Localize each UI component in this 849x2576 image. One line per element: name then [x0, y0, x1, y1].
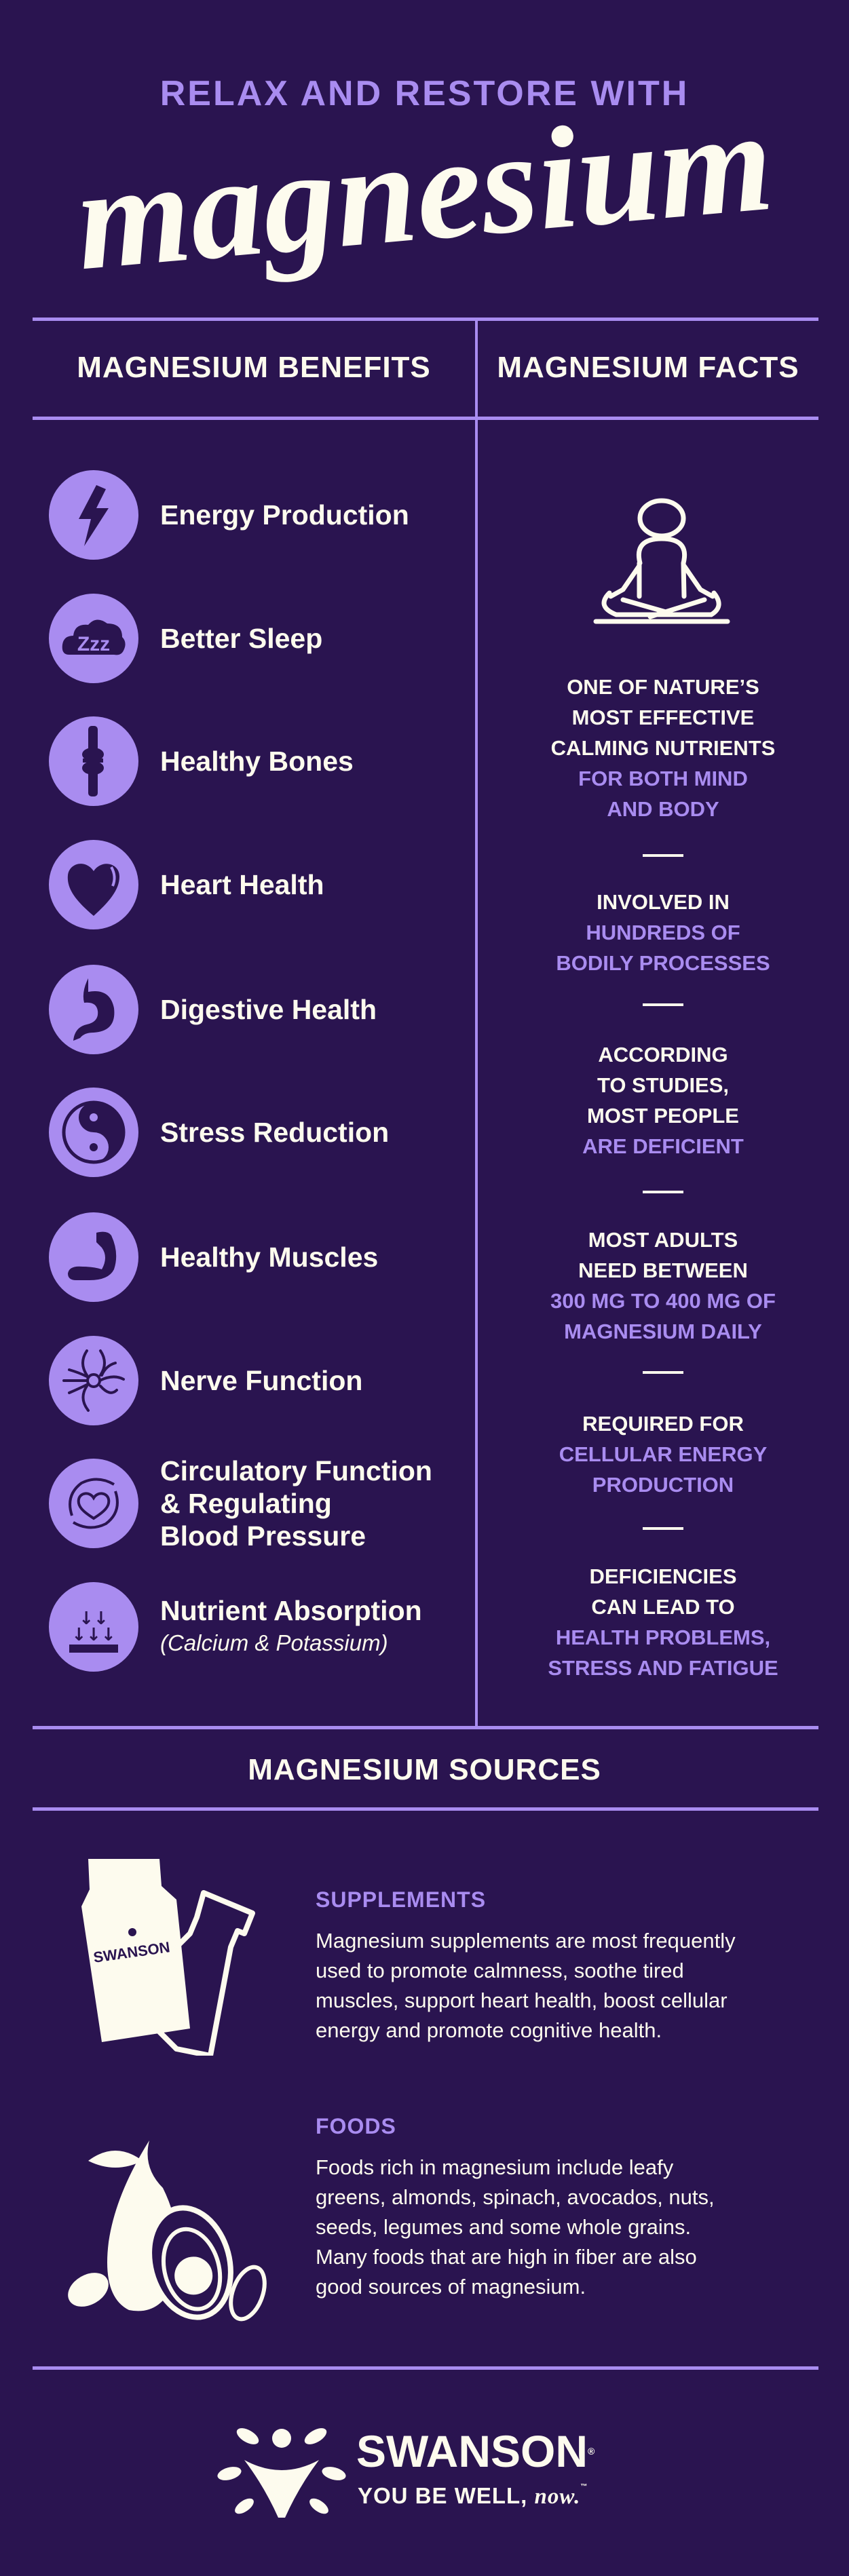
fact 2: INVOLVED IN [597, 890, 730, 914]
benefit: nutrient absorption: ↓↓ [79, 1609, 109, 1629]
fact 3: MOST PEOPLE [587, 1104, 739, 1128]
fact 4: 300 MG TO 400 MG OF [550, 1289, 776, 1313]
text: foods: Many foods that are high in fiber are also [316, 2245, 697, 2269]
icon: supplement bottle [81, 1859, 255, 2056]
benefit: stress reduction: Stress Reduction [160, 1117, 389, 1148]
text: supplements [316, 1887, 736, 2042]
fact 6: HEALTH PROBLEMS, [556, 1626, 770, 1649]
fact 4: MOST ADULTS [588, 1228, 738, 1252]
text: supplements: energy and promote cognitive health. [316, 2018, 662, 2042]
fact 5: REQUIRED FOR [582, 1412, 744, 1436]
text: supplements: muscles, support heart health, boost cellular [316, 1988, 728, 2012]
icon: swanson bird [217, 2428, 346, 2518]
benefit: heart health [49, 840, 324, 929]
fact 4: NEED BETWEEN [578, 1258, 748, 1282]
fact 2: BODILY PROCESSES [556, 951, 770, 975]
fact 6: DEFICIENCIES [589, 1564, 737, 1588]
benefit: energy production: Energy Production [160, 499, 409, 531]
fact 1 [551, 675, 775, 821]
text: foods: Foods rich in magnesium include leafy [316, 2155, 673, 2179]
fact 2 [556, 890, 770, 975]
benefit: stress reduction [49, 1088, 389, 1177]
benefit: healthy bones [49, 716, 354, 806]
benefit: healthy muscles [49, 1212, 378, 1302]
benefit: nutrient absorption: (Calcium & Potassium) [160, 1630, 388, 1655]
benefit: better sleep: Zzz [77, 633, 110, 655]
benefit: nutrient absorption: ↓↓↓ [71, 1625, 116, 1645]
benefit: better sleep: Better Sleep [160, 623, 322, 654]
benefit: digestive health [49, 965, 377, 1054]
benefit: nutrient absorption: Nutrient Absorption [160, 1595, 422, 1626]
benefit: circulatory function [49, 1455, 432, 1552]
fact 5 [559, 1412, 767, 1497]
fact 1: ONE OF NATURE’S [567, 675, 759, 699]
icon: supplement bottle: SWANSON [92, 1938, 171, 1966]
fact 1: MOST EFFECTIVE [572, 706, 754, 729]
text: foods [316, 2114, 715, 2299]
benefit: healthy bones: Healthy Bones [160, 746, 354, 777]
logo: swanson [217, 2426, 595, 2518]
fact 3: ARE DEFICIENT [582, 1134, 744, 1158]
heading: magnesium benefits: MAGNESIUM BENEFITS [77, 351, 431, 384]
title: magnesium script: magnesium [70, 79, 778, 301]
fact 6 [548, 1564, 778, 1680]
text: foods: good sources of magnesium. [316, 2275, 586, 2299]
benefit: energy production [49, 470, 409, 560]
title: relax and restore: RELAX AND RESTORE WITH [160, 74, 689, 113]
text: foods: greens, almonds, spinach, avocados, nuts, [316, 2185, 715, 2209]
fact 6: STRESS AND FATIGUE [548, 1656, 778, 1680]
benefit: healthy muscles: Healthy Muscles [160, 1242, 378, 1273]
fact 3: TO STUDIES, [597, 1073, 729, 1097]
text: foods: FOODS [316, 2114, 396, 2138]
heading: magnesium sources: MAGNESIUM SOURCES [248, 1753, 601, 1786]
benefit: nerve function: Nerve Function [160, 1365, 362, 1396]
fact 4: MAGNESIUM DAILY [564, 1320, 762, 1343]
fact 3: ACCORDING [598, 1043, 728, 1066]
fact 3 [582, 1043, 744, 1158]
text: supplements: Magnesium supplements are most frequently [316, 1929, 736, 1953]
benefit: better sleep [49, 594, 322, 683]
icon: meditation figure [593, 498, 730, 624]
benefit: nerve function [49, 1336, 362, 1425]
heading: magnesium facts: MAGNESIUM FACTS [497, 351, 799, 384]
text: supplements: SUPPLEMENTS [316, 1887, 486, 1912]
fact 5: CELLULAR ENERGY [559, 1442, 767, 1466]
fact 1: CALMING NUTRIENTS [551, 736, 775, 760]
logo text: SWANSON® [356, 2426, 595, 2476]
fact 2: HUNDREDS OF [586, 921, 740, 944]
fact 1: AND BODY [607, 797, 719, 821]
benefits list [49, 470, 432, 1672]
text: supplements: used to promote calmness, soothe tired [316, 1959, 684, 1982]
text: foods: seeds, legumes and some whole grains. [316, 2215, 691, 2239]
benefit: heart health: Heart Health [160, 869, 324, 900]
benefit: nutrient absorption [49, 1582, 422, 1672]
benefit: circulatory function: Circulatory Function [160, 1455, 432, 1486]
fact 5: PRODUCTION [592, 1473, 734, 1497]
fact 6: CAN LEAD TO [591, 1595, 735, 1619]
logo: swanson: YOU BE WELL, now.™ [358, 2483, 588, 2509]
fact 1: FOR BOTH MIND [578, 767, 748, 790]
icon: foods [68, 2140, 267, 2322]
benefit: digestive health: Digestive Health [160, 994, 377, 1025]
benefit: circulatory function: & Regulating [160, 1488, 332, 1519]
facts [548, 675, 778, 1680]
fact 4 [550, 1228, 776, 1343]
benefit: circulatory function: Blood Pressure [160, 1520, 366, 1552]
